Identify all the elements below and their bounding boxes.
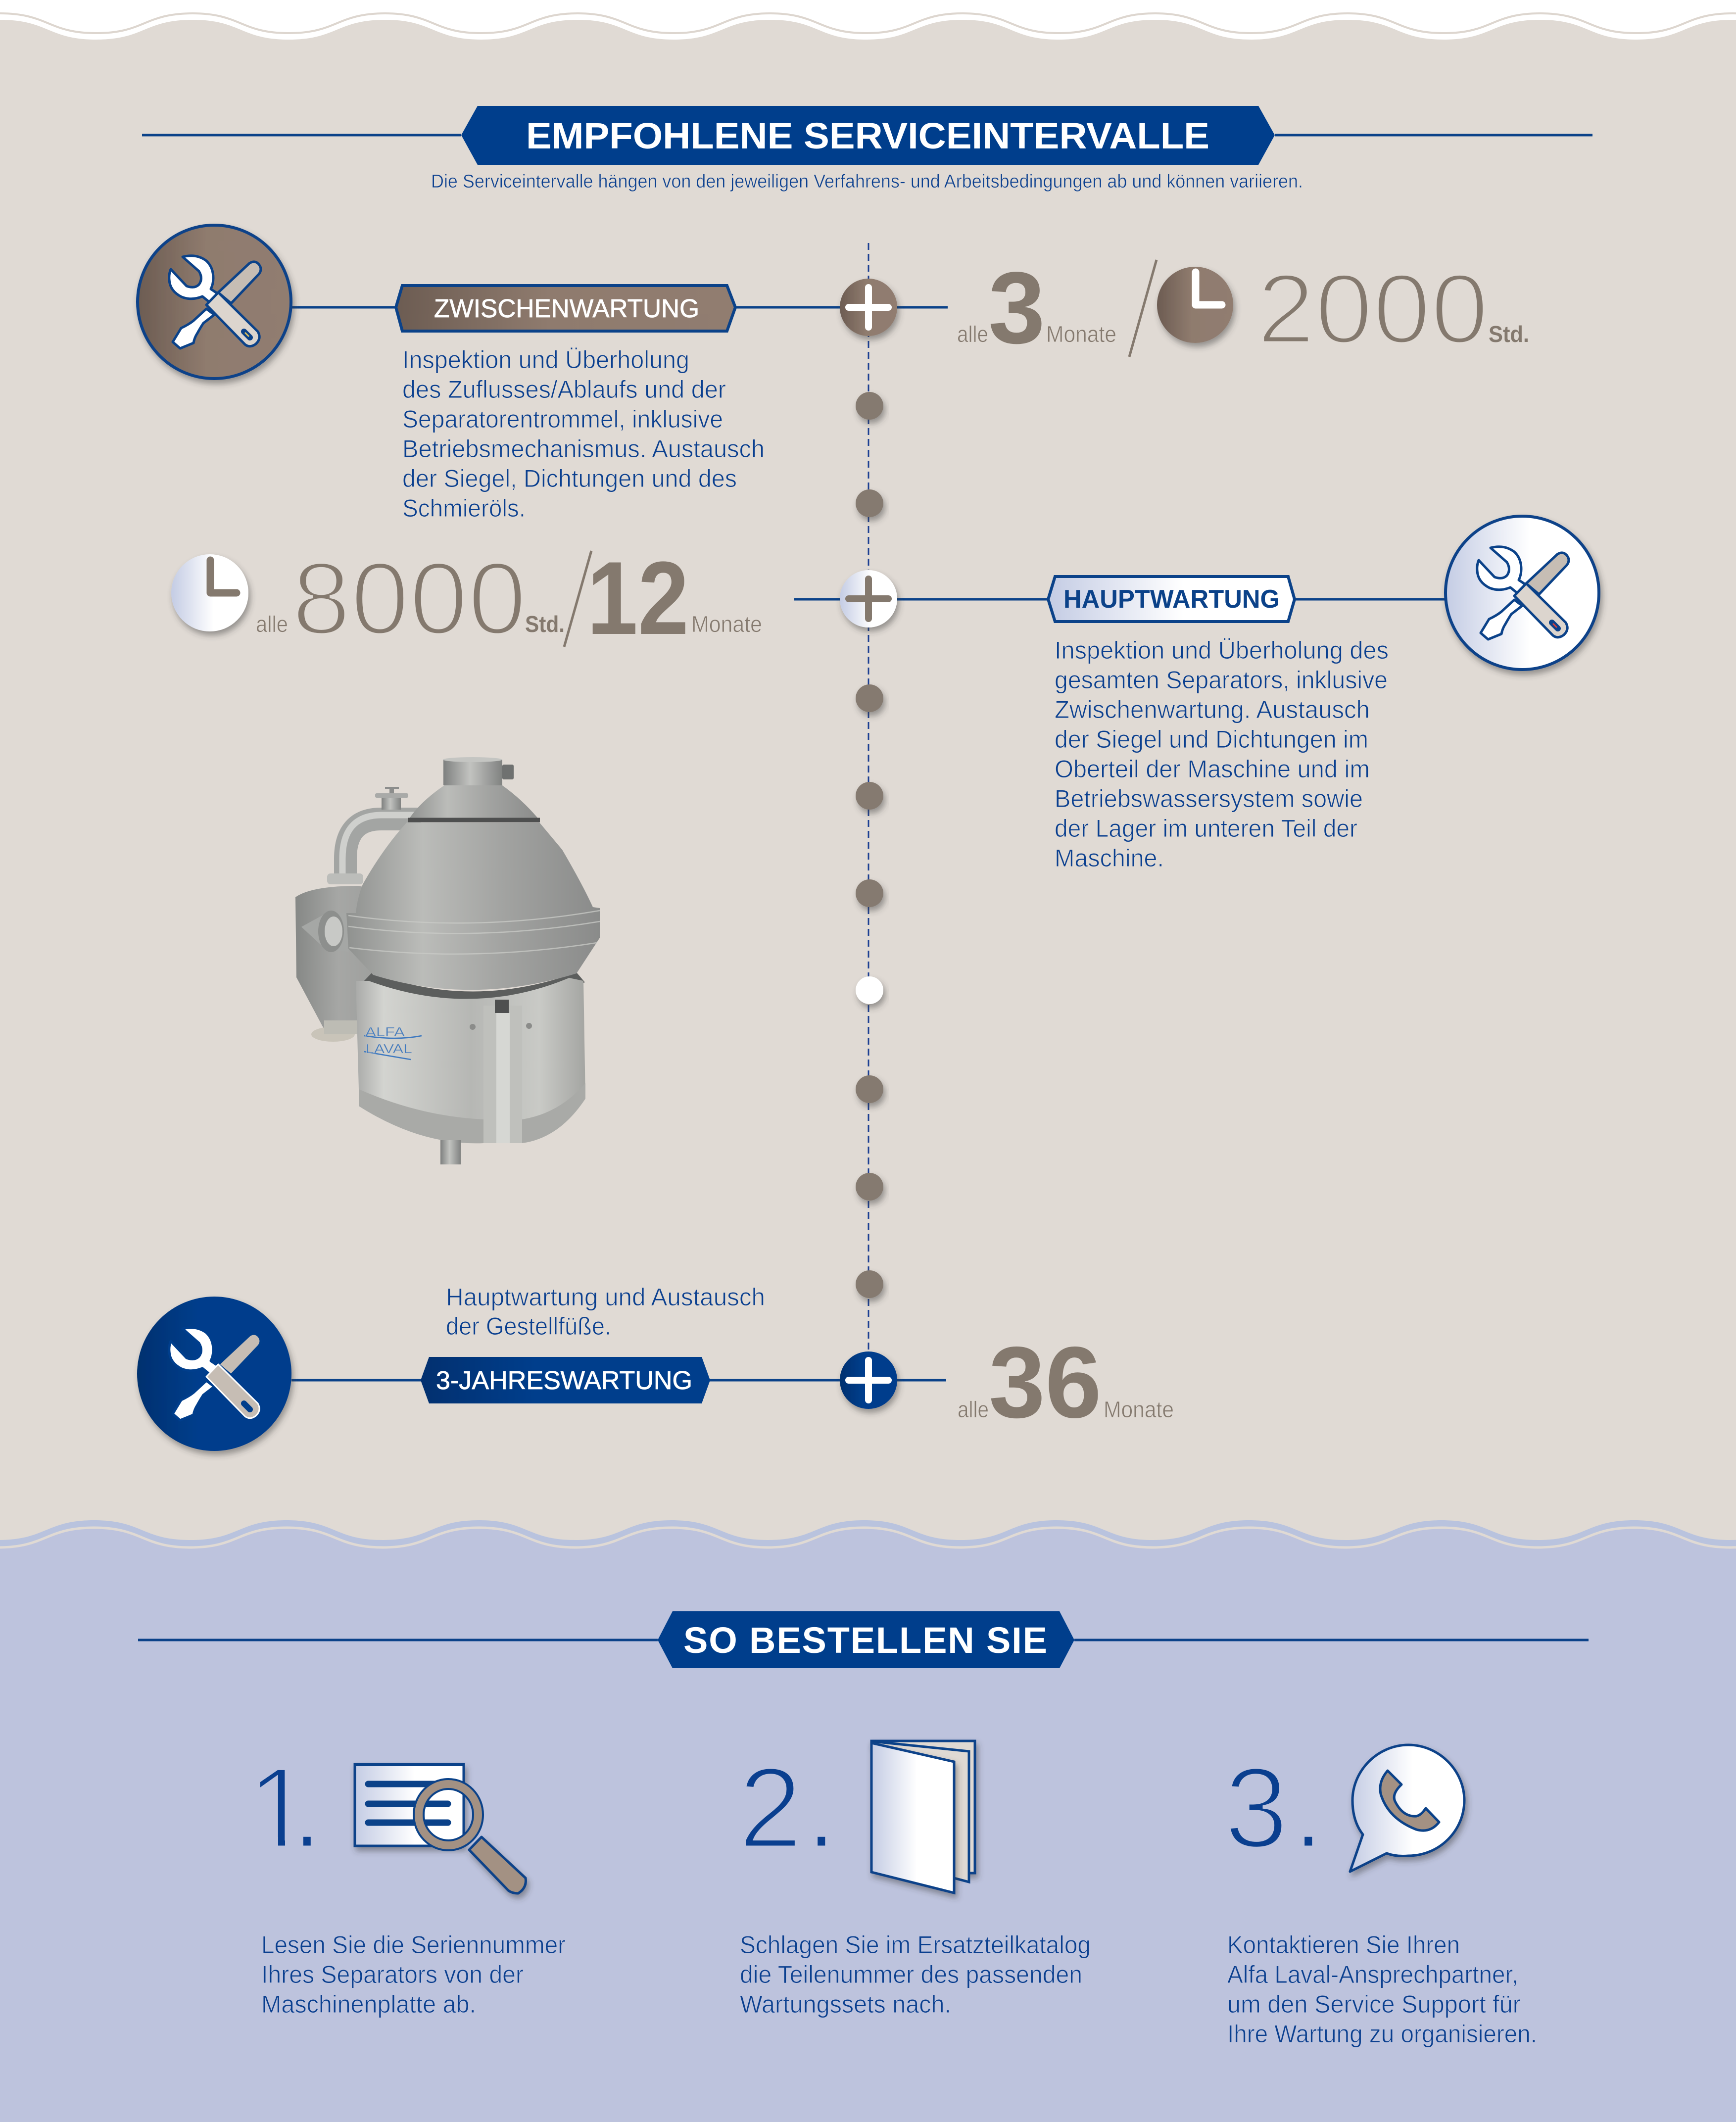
text block: Hauptwartung description: Zwischenwartung. Austausch — [1055, 696, 1370, 723]
text block: step 3: Alfa Laval-Ansprechpartner, — [1227, 1961, 1518, 1988]
stat: every 36 months — [958, 1326, 1174, 1439]
stat: every 8000 hours or 12 months: 8000 — [292, 541, 527, 656]
stat: every 36 months: 36 — [989, 1326, 1102, 1439]
text block: step 3: um den Service Support für — [1227, 1990, 1521, 2018]
label: 3-Jahreswartung: 3-JAHRESWARTUNG — [436, 1366, 692, 1395]
icon: document with magnifying glass — [355, 1763, 526, 1893]
text block: step 1 — [261, 1931, 566, 2018]
panel: beige background with wavy top edge — [0, 13, 1736, 1584]
text block: Zwischenwartung description: Inspektion und Überholung — [402, 346, 689, 374]
timeline: dashed vertical line — [868, 243, 869, 1381]
icon: wrench and screwdriver, brown — [138, 225, 291, 379]
text block: Zwischenwartung description: Betriebsmechanismus. Austausch — [402, 435, 765, 463]
step 1 number: 1 — [247, 1744, 311, 1872]
stat: every 8000 hours or 12 months: alle — [256, 611, 288, 637]
connector line: Zwischenwartung — [291, 306, 948, 309]
text block: step 2: Wartungssets nach. — [740, 1990, 951, 2018]
stat: every 36 months: alle — [958, 1397, 989, 1422]
text block: Zwischenwartung description: der Siegel, Dichtungen und des — [402, 465, 737, 492]
stat: every 36 months: Monate — [1104, 1397, 1174, 1422]
text block: step 1: Ihres Separators von der — [261, 1961, 524, 1988]
connector line: 3-Jahreswartung — [291, 1379, 946, 1382]
stat: every 8000 hours or 12 months: Std. — [525, 611, 565, 637]
stat: every 3 months or 2000 hours — [957, 251, 1529, 365]
text block: Hauptwartung description: Oberteil der Maschine und im — [1055, 755, 1370, 783]
heading: So bestellen Sie — [138, 1611, 1589, 1668]
stat: every 8000 hours or 12 months: Monate — [691, 611, 762, 637]
text block: step 3 — [1227, 1931, 1537, 2048]
step 2 number: 2. — [738, 1744, 837, 1872]
timeline dots — [856, 392, 883, 1298]
illustration: separator machine: ALFA — [365, 1024, 405, 1039]
panel: blue ordering section with wavy top edge — [0, 1520, 1736, 2122]
text block: Zwischenwartung description — [402, 346, 765, 522]
text block: step 2 — [740, 1931, 1091, 2018]
plus button: brown — [840, 279, 897, 336]
text block: Hauptwartung description: der Siegel und Dichtungen im — [1055, 725, 1368, 753]
text block: step 2: Schlagen Sie im Ersatzteilkatalog — [740, 1931, 1091, 1959]
text block: step 1: Lesen Sie die Seriennummer — [261, 1931, 566, 1959]
step 1 number: . — [291, 1744, 323, 1872]
icon: folded catalogue — [871, 1741, 975, 1893]
heading: So bestellen Sie: SO BESTELLEN SIE — [683, 1620, 1047, 1661]
text block: Zwischenwartung description: des Zuflusses/Ablaufs und der — [402, 376, 726, 403]
text block: Zwischenwartung description: Schmieröls. — [402, 494, 526, 522]
heading: Empfohlene Serviceintervalle — [142, 106, 1592, 165]
connector line: Hauptwartung — [794, 598, 1447, 601]
text block: 3-Jahreswartung description — [446, 1283, 765, 1340]
plus button: navy — [840, 1351, 897, 1409]
text block: 3-Jahreswartung description: der Gestellfüße. — [446, 1312, 611, 1340]
label: Hauptwartung: HAUPTWARTUNG — [1063, 585, 1280, 614]
illustration: separator machine — [295, 757, 600, 1164]
text block: step 1: Maschinenplatte ab. — [261, 1990, 476, 2018]
icon: wrench and screwdriver, white — [1446, 516, 1599, 670]
label: Zwischenwartung — [396, 286, 735, 331]
illustration: separator machine: LAVAL — [365, 1041, 412, 1056]
stat: every 3 months or 2000 hours: alle — [957, 321, 988, 347]
icon: speech bubble with phone — [1350, 1745, 1464, 1872]
label: Hauptwartung — [1048, 577, 1295, 622]
text block: step 3: Ihre Wartung zu organisieren. — [1227, 2020, 1537, 2048]
stat: every 3 months or 2000 hours: Std. — [1489, 321, 1529, 347]
icon: wrench and screwdriver, navy — [137, 1297, 291, 1451]
text block: Hauptwartung description: der Lager im unteren Teil der — [1055, 815, 1357, 842]
text block: Hauptwartung description: Inspektion und Überholung des — [1055, 636, 1389, 664]
text block: Hauptwartung description: gesamten Separators, inklusive — [1055, 666, 1388, 694]
text block: step 2: die Teilenummer des passenden — [740, 1961, 1082, 1988]
plus button: white — [840, 570, 897, 627]
label: Zwischenwartung: ZWISCHENWARTUNG — [434, 294, 699, 323]
subtitle text: Die Serviceintervalle hängen von den jeweiligen Verfahrens- und Arbeitsbedingungen ab und können variieren. — [431, 171, 1303, 192]
stat: every 3 months or 2000 hours: 2000 — [1257, 254, 1489, 364]
text block: step 3: Kontaktieren Sie Ihren — [1227, 1931, 1460, 1959]
text block: Hauptwartung description: Betriebswassersystem sowie — [1055, 785, 1363, 813]
stat: every 3 months or 2000 hours: 3 — [988, 251, 1045, 365]
stat: every 8000 hours or 12 months — [171, 540, 762, 656]
step 3 number: 3. — [1224, 1744, 1324, 1872]
label: 3-Jahreswartung — [421, 1357, 710, 1403]
text block: Hauptwartung description — [1055, 636, 1389, 872]
heading: Empfohlene Serviceintervalle: EMPFOHLENE SERVICEINTERVALLE — [526, 115, 1209, 156]
text block: 3-Jahreswartung description: Hauptwartung und Austausch — [446, 1283, 765, 1311]
stat: every 3 months or 2000 hours: Monate — [1046, 321, 1116, 347]
text block: Hauptwartung description: Maschine. — [1055, 844, 1164, 872]
stat: every 8000 hours or 12 months: 12 — [587, 540, 689, 656]
text block: Zwischenwartung description: Separatorentrommel, inklusive — [402, 405, 723, 433]
